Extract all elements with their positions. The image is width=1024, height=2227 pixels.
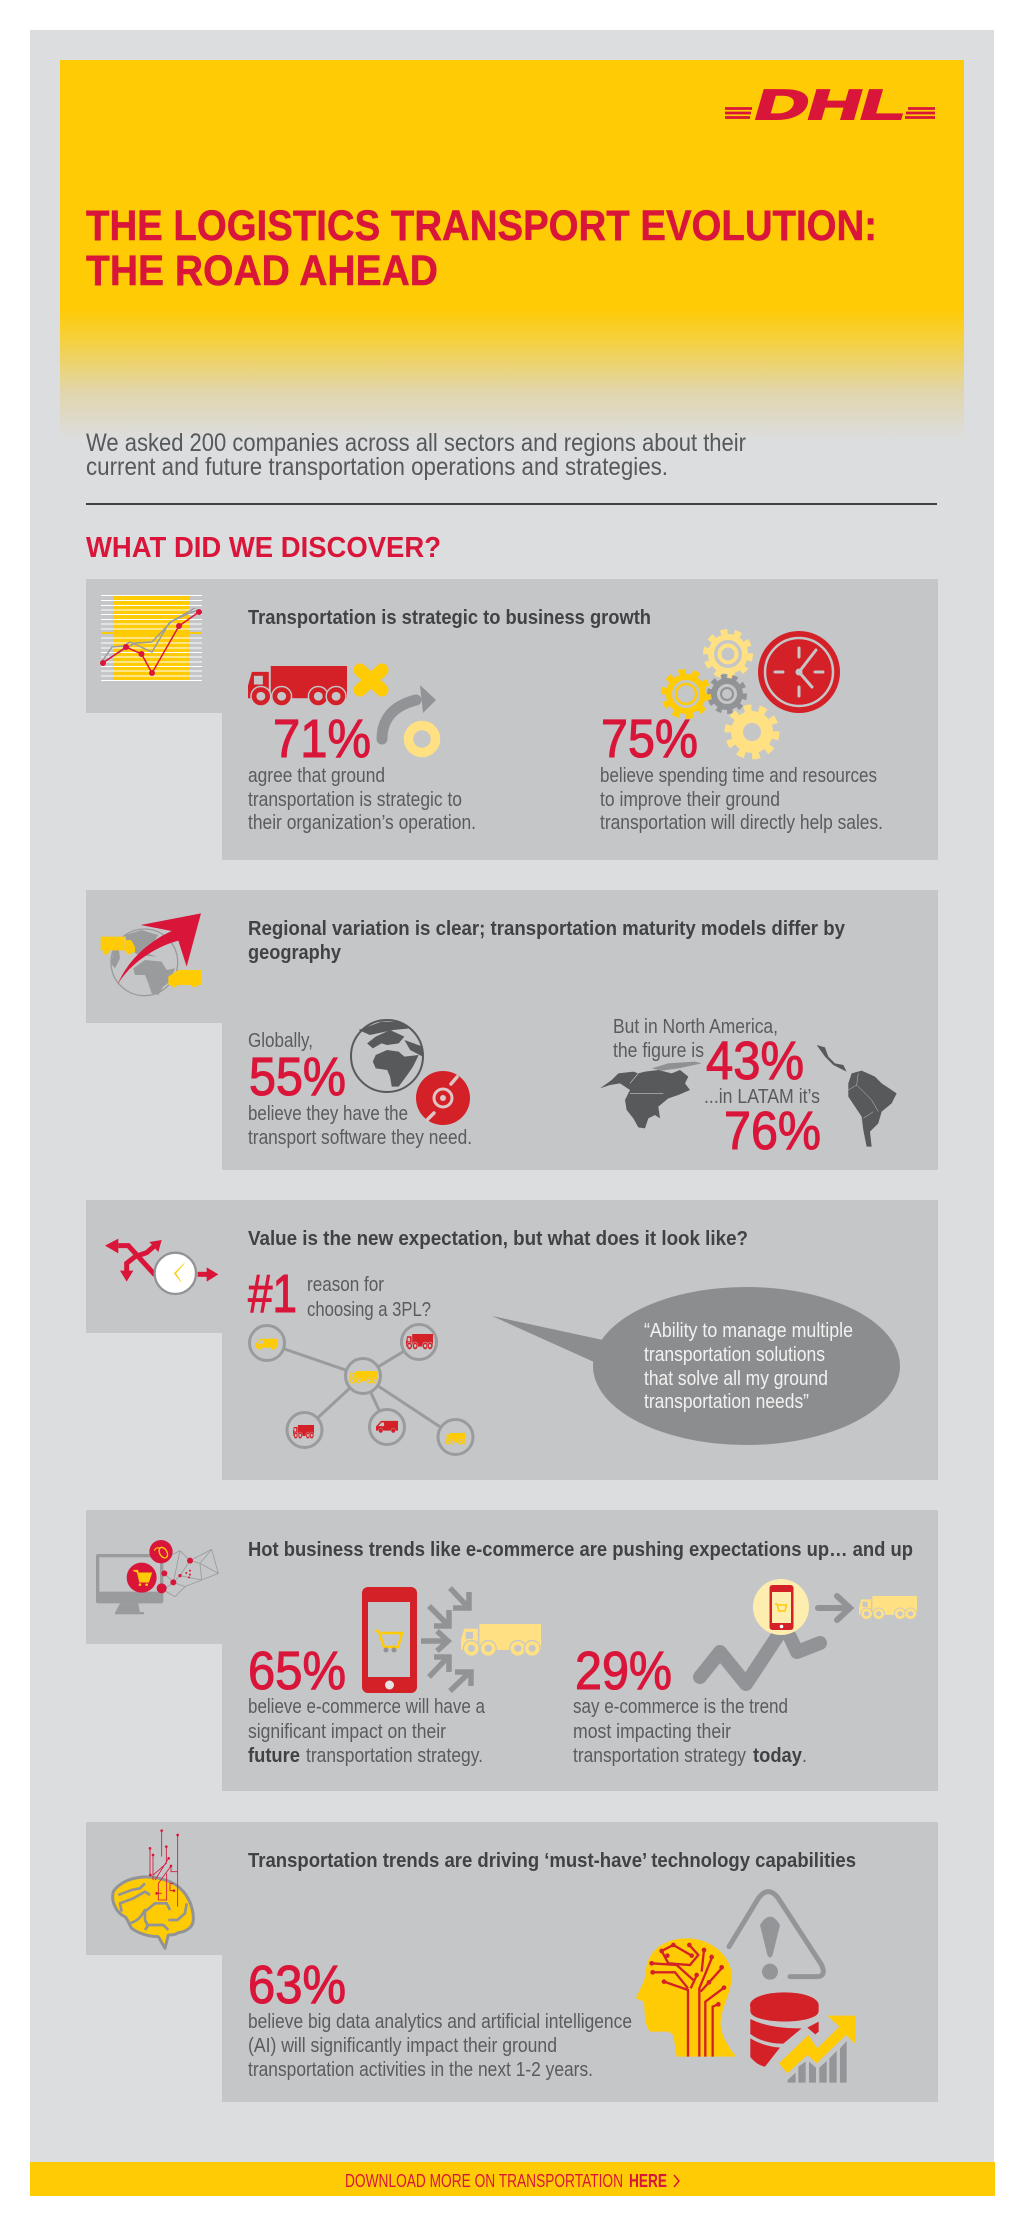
text: 29% description: today	[753, 1744, 803, 1767]
text: 63% description	[248, 2010, 632, 2081]
text: 71% description	[248, 764, 476, 834]
icon: monitor and network	[96, 1540, 218, 1614]
text: 29% description: transportation strategy	[573, 1744, 747, 1767]
logo: DHL	[725, 82, 935, 129]
text: reason for choosing: choosing a 3PL?	[307, 1298, 431, 1321]
icon: red disc	[416, 1071, 470, 1125]
icon: gears	[664, 632, 776, 756]
icon: AI, warning, data	[636, 1892, 855, 2083]
text: 29% description: say e-commerce is the trend	[573, 1695, 788, 1718]
logo: DHL: DHL	[749, 82, 913, 129]
icon: zigzag line	[700, 1637, 820, 1684]
text: reason for choosing	[307, 1273, 431, 1321]
panel 4: e-commerce	[86, 1510, 938, 1791]
header: yellow gradient banner	[60, 60, 964, 440]
icon: yellow ring	[408, 726, 436, 752]
stat: 29%: 29%	[575, 1641, 672, 1701]
text: 55% description: believe they have the	[248, 1102, 408, 1125]
icon: yellow truck	[461, 1624, 541, 1656]
icon: growth bars	[788, 2041, 847, 2083]
text: 29% description: most impacting their	[573, 1720, 731, 1743]
stat: 55%: 55%	[249, 1047, 346, 1107]
text: 65% description: future	[248, 1744, 300, 1767]
text: 65% description: transportation strategy.	[306, 1744, 483, 1767]
icon: line chart	[100, 595, 202, 680]
text: 65% description	[248, 1695, 485, 1767]
stat: 63%: 63%	[248, 1955, 346, 2015]
icon: rising arrow	[779, 2016, 855, 2073]
stat: 76%: 76%	[724, 1101, 821, 1161]
section heading: WHAT DID WE DISCOVER?	[86, 532, 441, 564]
speech bubble: “Ability to manage multiple	[644, 1319, 853, 1342]
text: 75% description: to improve their ground	[600, 788, 780, 811]
text: 63% description: (AI) will significantly impact their ground	[248, 2034, 557, 2057]
heading: Transportation trends are driving ‘must-have’ technology capabilities	[248, 1849, 856, 1872]
map: Latin America	[817, 1045, 897, 1147]
text: 71% description: their organization’s operation.	[248, 811, 476, 834]
text: 63% description: believe big data analytics and artificial intelligence	[248, 2010, 632, 2033]
speech bubble	[492, 1287, 900, 1445]
text: 55% description: transport software they need.	[248, 1126, 472, 1149]
panel 2: regional variation	[86, 890, 938, 1170]
text: 29% description	[573, 1695, 807, 1767]
panel 1: strategic to growth	[86, 579, 938, 860]
speech bubble: transportation needs”	[644, 1390, 809, 1413]
title: THE LOGISTICS TRANSPORT EVOLUTION:	[86, 202, 877, 250]
text: 65% description: significant impact on their	[248, 1720, 446, 1743]
title	[86, 202, 877, 295]
text: North America: the figure is	[613, 1039, 704, 1062]
footer bar: HERE	[629, 2171, 667, 2191]
stat: 43%: 43%	[706, 1031, 804, 1091]
icon: warning triangle	[729, 1892, 823, 1980]
text: 75% description: believe spending time and resources	[600, 764, 877, 787]
map: North America	[600, 1062, 702, 1128]
intro text: We asked 200 companies across all sectors and regions about their	[86, 429, 746, 457]
text: 75% description: transportation will directly help sales.	[600, 811, 883, 834]
panel 3: value	[86, 1200, 938, 1480]
heading: Hot business trends like e-commerce are pushing expectations up… and up	[248, 1538, 913, 1561]
intro text	[86, 429, 746, 481]
text: 63% description: transportation activities in the next 1-2 years.	[248, 2058, 593, 2081]
heading: Transportation is strategic to business growth	[248, 606, 651, 629]
intro text: current and future transportation operations and strategies.	[86, 453, 668, 481]
stat: 75%: 75%	[601, 709, 698, 769]
icon: arrow to truck	[818, 1596, 917, 1620]
icon: curved arrow	[382, 685, 436, 739]
icon: AI head	[636, 1938, 736, 2057]
text: 29% description: .	[802, 1744, 807, 1767]
text: 55% description	[248, 1102, 472, 1149]
icon: red truck	[248, 666, 347, 706]
heading	[248, 917, 846, 964]
heading: geography	[248, 941, 342, 964]
icon: brain with circuits	[113, 1829, 193, 1948]
icon: phone in circle	[753, 1579, 809, 1635]
icon: clock with arrows	[105, 1239, 218, 1294]
text: 75% description	[600, 764, 883, 834]
icon: globe with arrow and trucks	[101, 913, 201, 996]
icon: converging arrows	[421, 1588, 471, 1691]
icon: dark globe	[351, 1020, 423, 1092]
footer bar	[30, 2162, 995, 2196]
panel 5: technology	[86, 1822, 938, 2102]
stat: 71%: 71%	[273, 709, 371, 769]
text: 71% description: agree that ground	[248, 764, 385, 787]
text: globally: Globally,	[248, 1029, 313, 1052]
icon: clock	[758, 631, 840, 713]
icon: database	[750, 1992, 819, 2067]
icon: yellow cross	[360, 670, 382, 690]
text: North America	[613, 1015, 778, 1062]
footer bar: DOWNLOAD MORE ON TRANSPORTATION	[345, 2171, 623, 2191]
speech bubble: transportation solutions	[644, 1343, 825, 1366]
icon: phone with cart	[362, 1587, 417, 1693]
text: North America: But in North America,	[613, 1015, 778, 1038]
text: 65% description: believe e-commerce will have a	[248, 1695, 485, 1718]
text: reason for choosing: reason for	[307, 1273, 384, 1296]
stat: 65%: 65%	[248, 1641, 346, 1701]
diagram: network of vehicles	[250, 1324, 473, 1454]
text: 71% description: transportation is strategic to	[248, 788, 462, 811]
speech bubble: that solve all my ground	[644, 1367, 828, 1390]
text: LATAM: ...in LATAM it’s	[704, 1085, 820, 1108]
title: THE ROAD AHEAD	[86, 247, 438, 295]
heading: Regional variation is clear; transportation maturity models differ by	[248, 917, 846, 940]
stat: #1: #1	[248, 1264, 297, 1324]
heading: Value is the new expectation, but what does it look like?	[248, 1227, 748, 1250]
